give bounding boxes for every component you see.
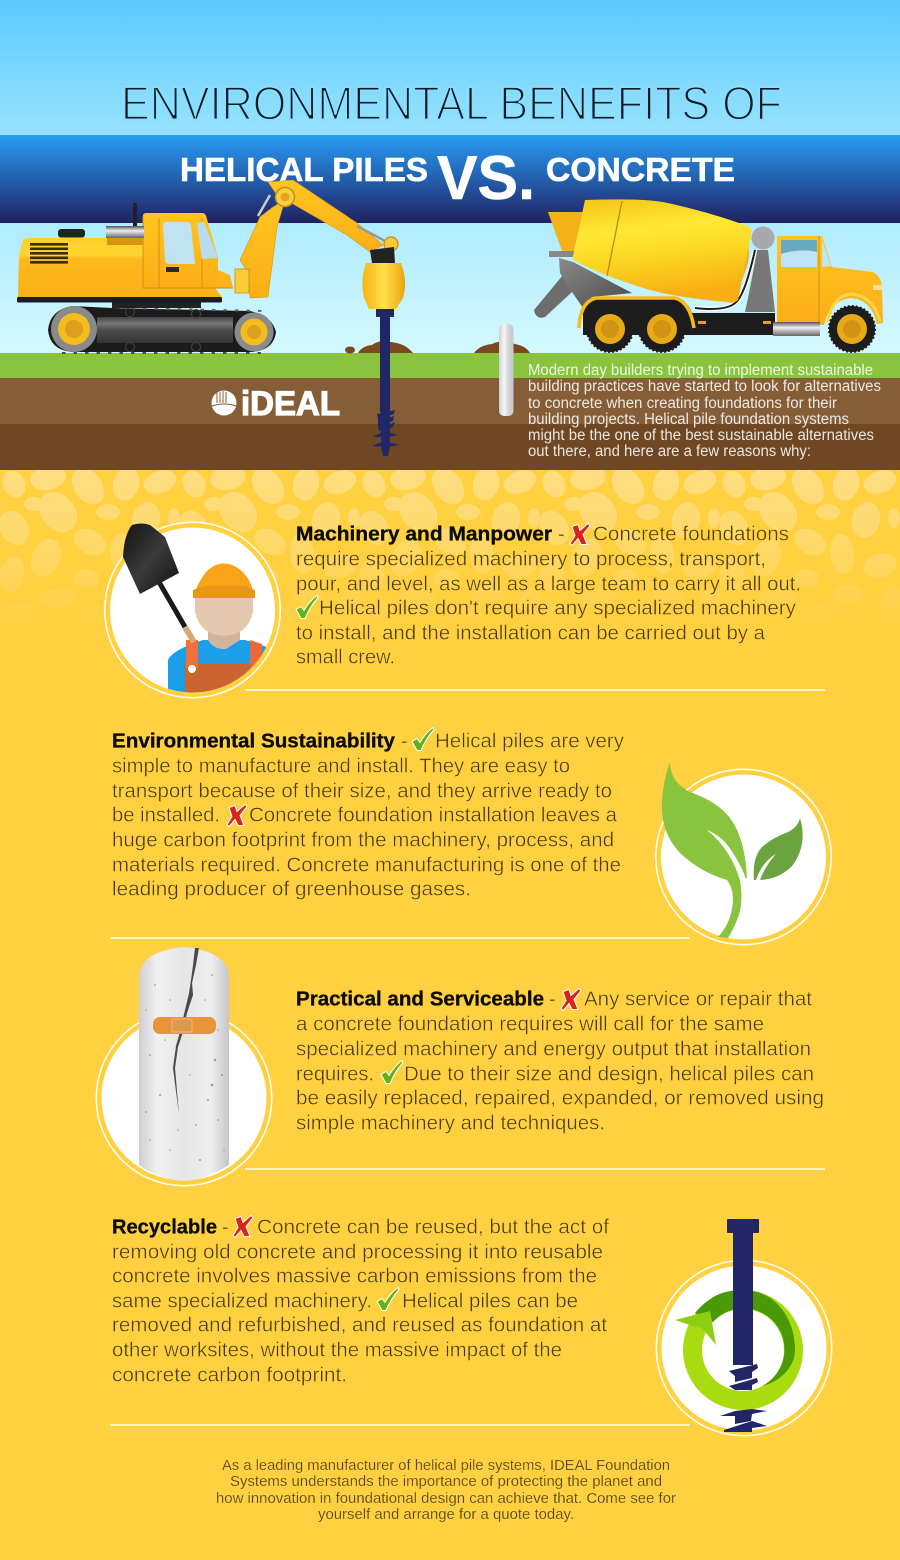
cab windows	[163, 222, 195, 264]
text: recyclable: concrete involves massive carbon emissions from the	[112, 1266, 597, 1288]
text: environmental sustainability: materials required. Concrete manufacturing is one of the	[112, 854, 621, 876]
stick arm	[268, 180, 383, 252]
text: environmental sustainability: Helical piles are very	[435, 730, 624, 752]
excavator base	[112, 302, 201, 308]
cement mixer truck	[534, 199, 883, 352]
recycling ring	[692, 1300, 794, 1400]
text: environmental sustainability: be installed.	[112, 804, 220, 826]
excavator	[17, 180, 405, 353]
intro paragraph: to concrete when creating foundations for their	[528, 395, 837, 412]
text: recyclable	[112, 1216, 609, 1386]
text: machinery and manpower	[296, 524, 801, 668]
truck frame	[559, 258, 632, 308]
footer text: As a leading manufacturer of helical pile systems, IDEAL Foundation	[222, 1458, 670, 1474]
text: recyclable: removed and refurbished, and reused as foundation at	[112, 1314, 607, 1336]
excavator track	[48, 306, 276, 353]
icon: helical pile with recycling arrow	[656, 1219, 832, 1436]
truck cab	[777, 236, 883, 325]
pebble texture	[0, 470, 900, 611]
text: environmental sustainability: Environmental Sustainability	[112, 730, 396, 752]
text: machinery and manpower: -	[558, 524, 565, 546]
truck chassis	[583, 299, 775, 335]
text: environmental sustainability: transport because of their size, and they arrive ready to	[112, 780, 612, 802]
footer text: yourself and arrange for a quote today.	[318, 1507, 574, 1523]
text: practical and serviceable: Due to their size and design, helical piles can	[404, 1064, 814, 1086]
sky	[0, 0, 900, 354]
intro paragraph: building projects. Helical pile foundation systems	[528, 411, 849, 428]
panel: environmental sustainability	[112, 728, 832, 946]
banner	[0, 135, 900, 223]
truck drum	[573, 199, 751, 303]
text: environmental sustainability: -	[401, 730, 408, 752]
truck chute	[534, 275, 572, 318]
text: practical and serviceable	[296, 988, 824, 1134]
ground layers	[0, 353, 900, 470]
truck fuel tank	[773, 322, 820, 336]
panel: recyclable	[112, 1216, 832, 1436]
text: recyclable: concrete carbon footprint.	[112, 1364, 347, 1386]
excavator body	[18, 213, 233, 297]
truck rear drum collar	[738, 240, 749, 290]
bandage	[153, 1017, 216, 1034]
boom	[240, 200, 285, 298]
engine grille	[30, 243, 68, 264]
text: environmental sustainability: simple to manufacture and install. They are easy to	[112, 756, 570, 778]
intro paragraph: out there, and here are a few reasons why:	[528, 443, 811, 460]
pile shaft	[720, 1219, 767, 1432]
helical pile in ground	[372, 309, 399, 456]
text: recyclable: Concrete can be reused, but the act of	[257, 1216, 609, 1238]
truck pedestal	[745, 250, 775, 312]
text: practical and serviceable: be easily replaced, repaired, expanded, or removed using	[296, 1088, 824, 1110]
panel: practical and serviceable	[96, 947, 824, 1186]
text: recyclable: Helical piles can be	[402, 1290, 578, 1312]
footer text: Systems understands the importance of protecting the planet and	[230, 1474, 662, 1490]
text: recyclable: removing old concrete and processing it into reusable	[112, 1242, 603, 1264]
text: machinery and manpower: pour, and level, as well as a large team to carry it all out.	[296, 574, 801, 596]
text: practical and serviceable: specialized machinery and energy output that installation	[296, 1038, 811, 1060]
exhaust	[133, 203, 137, 227]
panel: machinery and manpower	[104, 522, 801, 700]
text: recyclable: same specialized machinery.	[112, 1290, 372, 1312]
pillar speckles	[145, 974, 225, 1161]
text: practical and serviceable: a concrete foundation requires will call for the same	[296, 1014, 764, 1036]
text: machinery and manpower: Concrete foundations	[593, 524, 789, 546]
icon: cracked concrete pillar with bandage	[96, 947, 272, 1186]
excavator cab panel	[143, 213, 218, 288]
text: practical and serviceable: requires.	[296, 1064, 374, 1086]
footer text: how innovation in foundational design can achieve that. Come see for	[216, 1491, 676, 1507]
drill barrel	[362, 263, 405, 309]
title: ENVIRONMENTAL BENEFITS OF	[121, 76, 782, 130]
text: environmental sustainability	[112, 728, 624, 900]
text: practical and serviceable: simple machinery and techniques.	[296, 1112, 605, 1134]
banner heading: helical piles vs concrete: CONCRETE	[546, 151, 735, 188]
icon: sprout	[655, 762, 832, 946]
IDEAL logo: iDEAL	[241, 385, 340, 423]
truck mixer ball	[752, 226, 774, 250]
text: recyclable: Recyclable	[112, 1216, 217, 1238]
drill connector	[370, 247, 395, 263]
text: environmental sustainability: huge carbon footprint from the machinery, process, and	[112, 830, 614, 852]
banner heading: helical piles vs concrete: HELICAL PILES	[180, 151, 428, 188]
text: practical and serviceable: Any service or repair that	[584, 988, 812, 1010]
text: recyclable: other worksites, without the massive impact of the	[112, 1340, 562, 1362]
pillar crack	[173, 948, 199, 1115]
text: practical and serviceable: -	[549, 988, 556, 1010]
text: machinery and manpower: small crew.	[296, 646, 395, 668]
text: machinery and manpower: require specialized machinery to process, transport,	[296, 548, 766, 570]
footer text	[216, 1458, 676, 1523]
text: machinery and manpower: Helical piles don't require any specialized machinery	[319, 598, 796, 620]
text: recyclable: -	[222, 1216, 229, 1238]
text: machinery and manpower: to install, and the installation can be carried out by a	[296, 622, 766, 644]
text: practical and serviceable: Practical and Serviceable	[296, 988, 544, 1010]
intro paragraph: might be the one of the best sustainable alternatives	[528, 427, 874, 444]
icon: worker with shovel	[104, 522, 281, 700]
soil mound right	[474, 342, 530, 353]
intro paragraph	[528, 362, 881, 460]
soil mound left	[345, 341, 413, 354]
truck hopper	[548, 212, 583, 251]
text: environmental sustainability: Concrete foundation installation leaves a	[249, 804, 618, 826]
text: environmental sustainability: leading producer of greenhouse gases.	[112, 878, 471, 900]
intro paragraph: Modern day builders trying to implement sustainable	[528, 362, 873, 379]
concrete pile in ground	[499, 324, 514, 416]
arrow head	[675, 1311, 716, 1345]
truck wheels	[587, 306, 875, 352]
intro paragraph: building practices have started to look for alternatives	[528, 378, 881, 395]
banner heading: helical piles vs concrete	[180, 144, 735, 213]
background: yellow page	[0, 470, 900, 1560]
banner heading: helical piles vs concrete: VS.	[437, 144, 535, 213]
text: machinery and manpower: Machinery and Manpower	[296, 524, 552, 546]
